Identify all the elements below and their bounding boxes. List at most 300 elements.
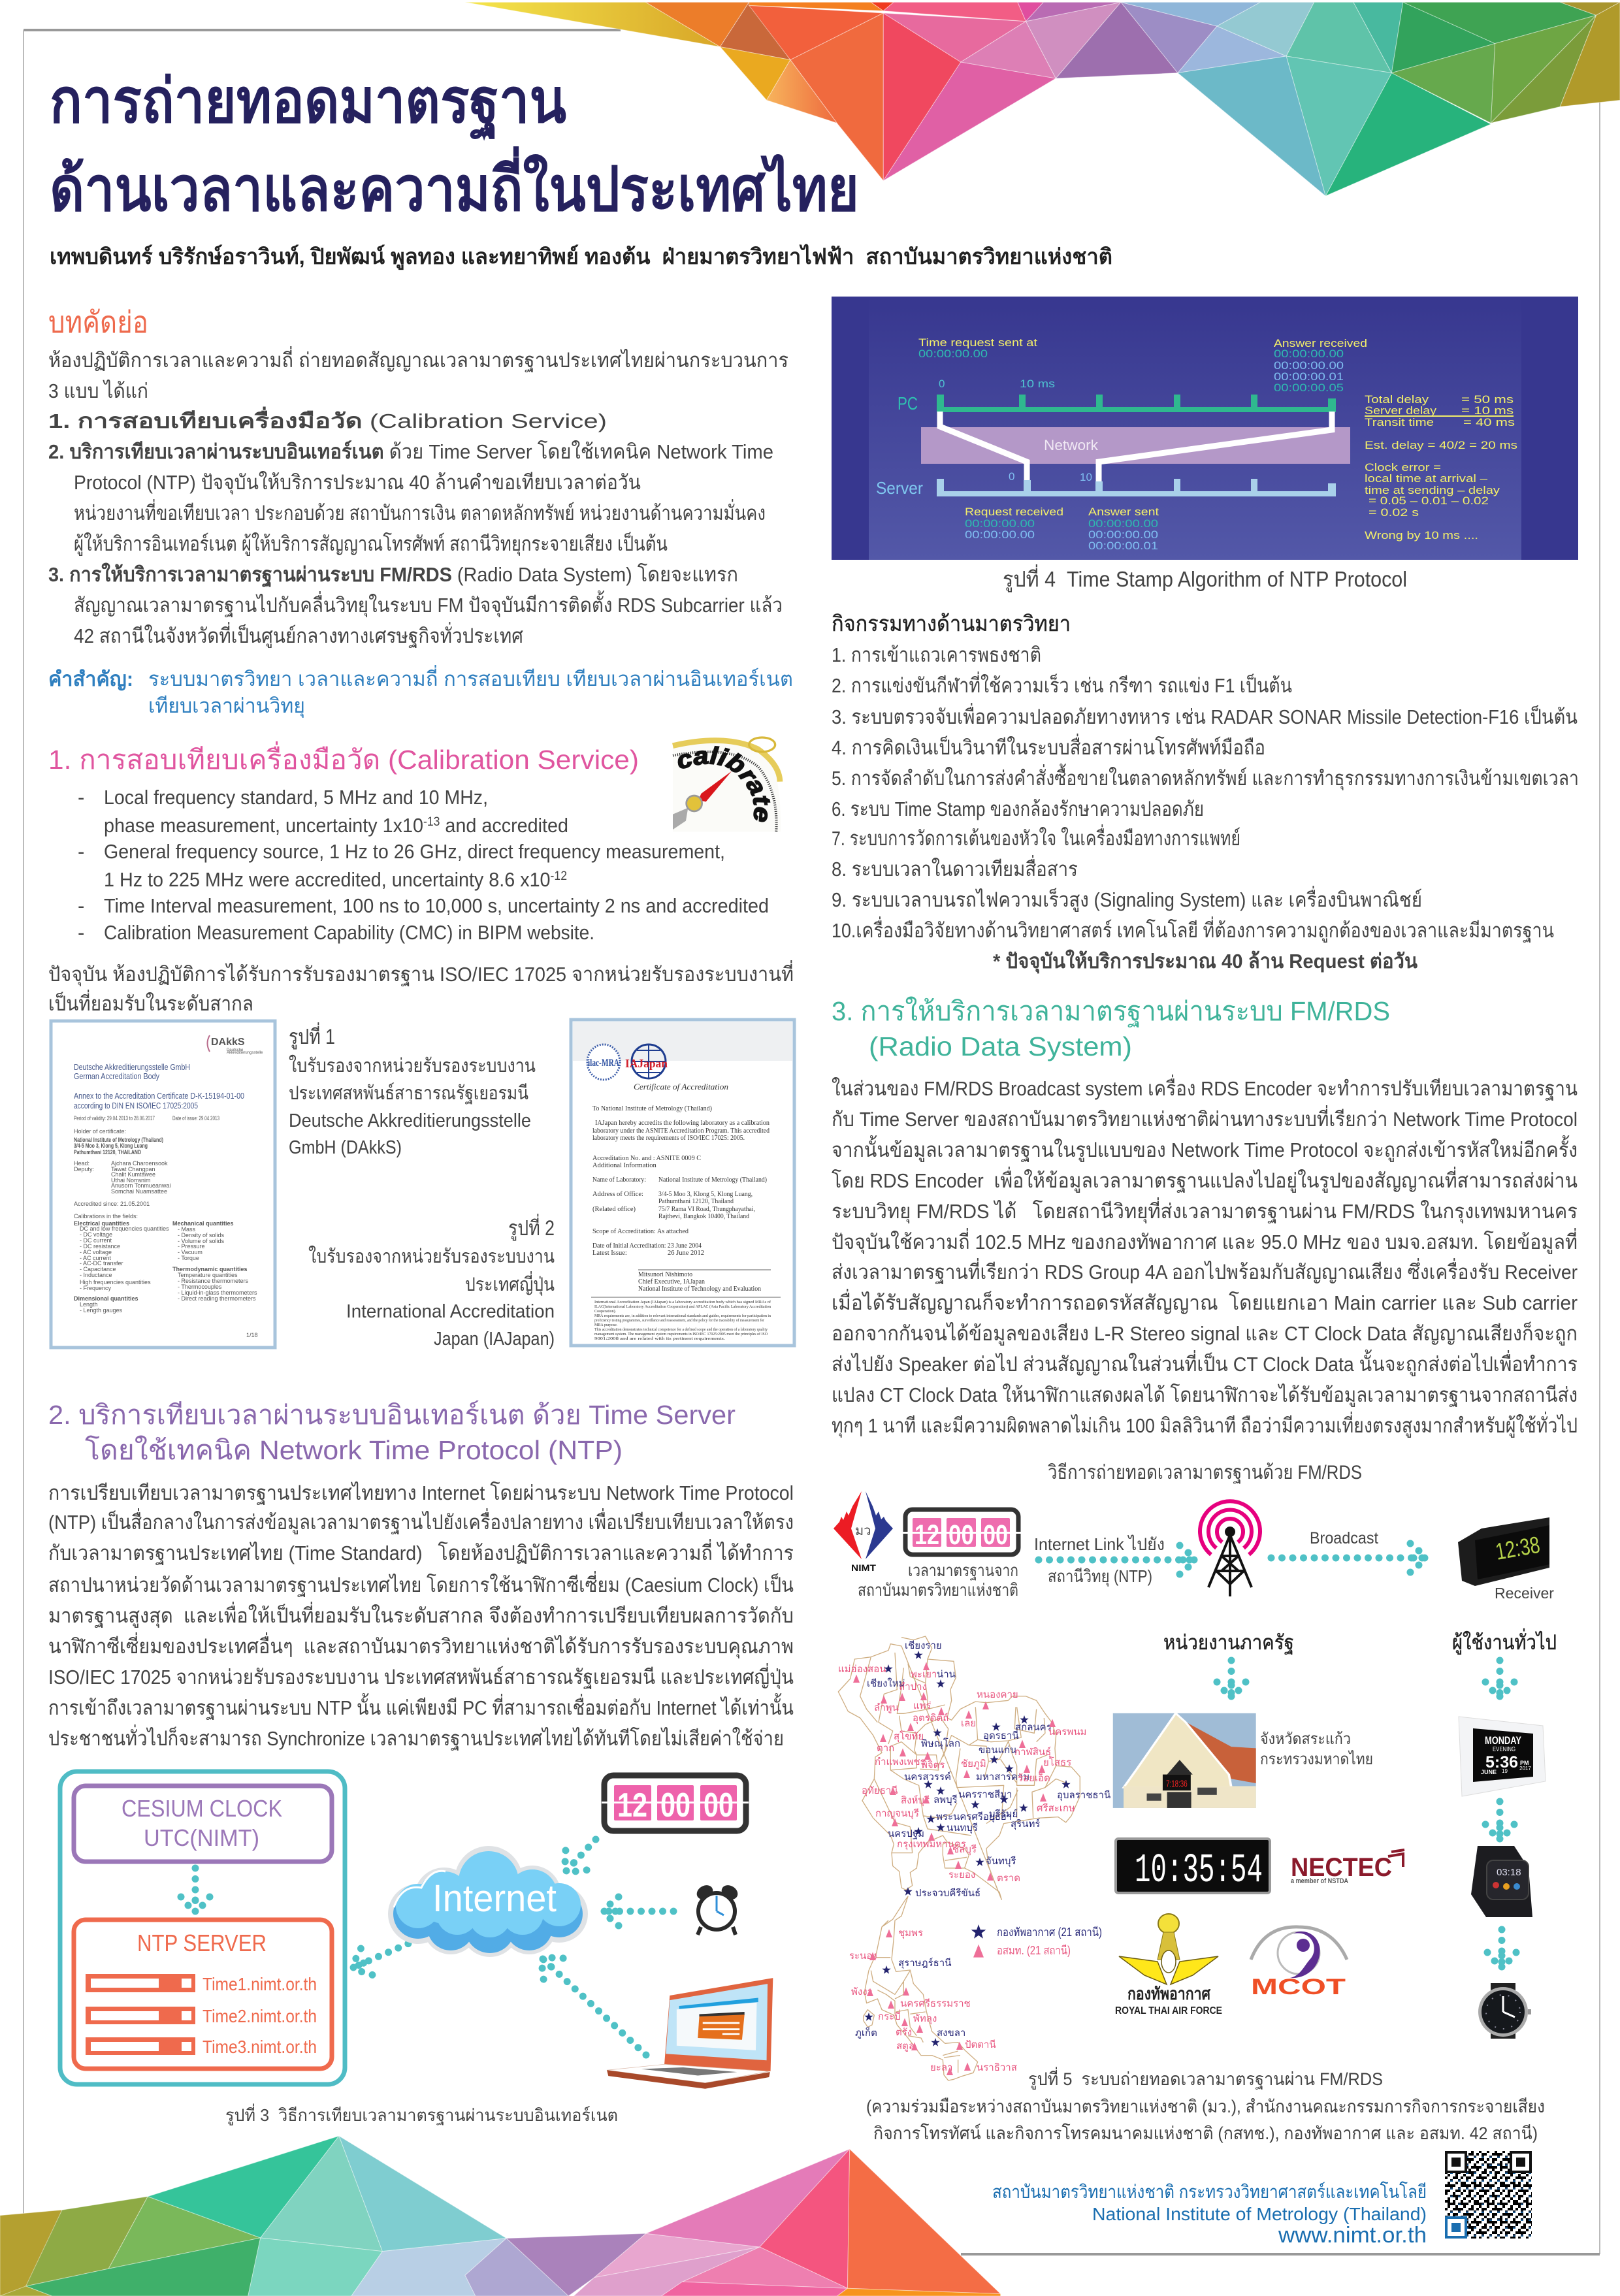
- MCOT station labels: หนองคาย: [977, 1689, 1018, 1700]
- MCOT station labels: ตรัง: [896, 2027, 912, 2038]
- government agencies heading: หน่วยงานภาครัฐ: [1163, 1631, 1294, 1655]
- logo: NIMT: NIMT: [851, 1562, 876, 1573]
- request and answer labels: Time request sent at: [918, 336, 1037, 349]
- certificate: DAkkS: Chalit Kumtawee: [111, 1171, 155, 1178]
- delay calculation: local time at arrival –: [1365, 472, 1488, 485]
- certificate: IAJapan: International Accreditation Japan (IAJapan) is a laboratory accreditation body which has signed MRAs of: [594, 1300, 771, 1304]
- arrow: internet to NTP server: [343, 1939, 418, 1985]
- section 2 body text: [48, 1481, 794, 1751]
- logo: MCOT: [1251, 1927, 1347, 1999]
- network band: [921, 427, 1350, 464]
- section 2 heading: โดยใช้เทคนิค Network Time Protocol (NTP): [85, 1435, 623, 1465]
- NTP server box: NTP SERVER: [137, 1930, 267, 1956]
- section 1 heading: 1. การสอบเทียบเครื่องมือวัด (Calibration Service): [48, 741, 639, 775]
- footer institute credit: National Institute of Metrology (Thailand): [1092, 2204, 1427, 2224]
- air force station labels: มหาสารคาม: [976, 1771, 1029, 1783]
- icon: radio tower: [1200, 1501, 1260, 1596]
- metrology activities list: 6. ระบบ Time Stamp ของกล้องรักษาความปลอดภัย: [832, 798, 1204, 820]
- certificate: DAkkS: Pathumthani 12120, THAILAND: [74, 1149, 141, 1156]
- certificate: DAkkS: - Resistance thermometers: [178, 1278, 249, 1284]
- certificate: IAJapan: Scope of Accreditation: As attached: [592, 1228, 689, 1235]
- title: การถ่ายทอดมาตรฐาน: [50, 67, 566, 141]
- Sa Kaeo label: กระทรวงมหาดไทย: [1260, 1750, 1373, 1768]
- figure 5 title: วิธีการถ่ายทอดเวลามาตรฐานด้วย FM/RDS: [1048, 1462, 1362, 1484]
- certificate: IAJapan: Certificate of Accreditation: [634, 1082, 728, 1091]
- air force station labels: ประจวบคีรีขันธ์: [915, 1888, 980, 1899]
- section 3 heading: 3. การให้บริการเวลามาตรฐานผ่านระบบ FM/RDS: [832, 996, 1390, 1027]
- light-blue timestamps: 00:00:00.00: [965, 528, 1035, 541]
- MCOT station labels: กระบี่: [878, 2009, 901, 2022]
- certificate: DAkkS: 3/4-5 Moo 3, Klong 5, Klong Luang: [74, 1142, 148, 1149]
- section 2 body text: ISO/IEC 17025 จากหน่วยรับรองระบบงาน ประเทศสหพันธ์สาธารณรัฐเยอรมนี และประเทศญี่ปุ่น: [48, 1663, 794, 1690]
- delay calculation: Transit time: [1365, 416, 1434, 428]
- icon: alarm clock: [694, 1883, 740, 1935]
- PC timeline: 0: [939, 378, 945, 390]
- logo: NECTEC: a member of NSTDA: [1291, 1877, 1348, 1885]
- map: Thailand FM/RDS stations: [838, 1636, 1110, 2080]
- teal timestamps: 00:00:00.00: [965, 517, 1035, 530]
- section 1 body text: [48, 960, 794, 1015]
- abstract body: 42 สถานีในจังหวัดที่เป็นศูนย์กลางทางเศรษฐกิจทั่วประเทศ: [74, 622, 523, 648]
- metrology activities list: 4. การคิดเงินเป็นวินาทีในระบบสื่อสารผ่านโทรศัพท์มือถือ: [832, 734, 1265, 759]
- MCOT station labels: สุโขทัย: [894, 1730, 924, 1743]
- MCOT station labels: ตาก: [877, 1743, 894, 1754]
- certificate: DAkkS: according to DIN EN ISO/IEC 17025:2005: [74, 1101, 198, 1110]
- icon: flip clock small: 00: [983, 1519, 1008, 1551]
- certificate: IAJapan: IAJapan: [625, 1057, 668, 1070]
- certificate: IAJapan: Date of Initial Accreditation: 23 June 2004: [592, 1242, 702, 1250]
- certificate: IAJapan: Pathumthani 12120, Thailand: [658, 1198, 734, 1205]
- icon: internet cloud: [388, 1846, 588, 1957]
- certificate: DAkkS: German Accreditation Body: [74, 1071, 159, 1081]
- figure 2 caption: Japan (IAJapan): [434, 1329, 555, 1350]
- white signal paths: [940, 412, 1332, 481]
- certificate: DAkkS: Thermodynamic quantities: [172, 1266, 248, 1272]
- certificate: IAJapan: Additional Information: [592, 1162, 656, 1169]
- arrow: NIMT to tower: [1039, 1542, 1198, 1578]
- internet link label: [1034, 1534, 1165, 1587]
- icon: receiver clock: [1458, 1517, 1554, 1602]
- icon: calibrate compass: calibrate: [678, 746, 771, 822]
- air force station labels: บุรีรัมย์: [989, 1809, 1018, 1820]
- section 1 bullet list: -13: [423, 815, 440, 829]
- delay calculation: Clock error =: [1365, 461, 1441, 474]
- air force station labels: น่าน: [937, 1669, 956, 1680]
- internet link label: Internet Link ไปยัง: [1034, 1534, 1165, 1554]
- icon: flip clock small: 12: [915, 1519, 939, 1551]
- panel: server frame: [60, 1771, 345, 2084]
- delay calculation: = 40 ms: [1463, 416, 1515, 428]
- delay calculation: = 10 ms: [1461, 404, 1514, 417]
- figure 4: NTP time stamp diagram: [832, 297, 1578, 560]
- icon: digital calendar clock: PM: [1520, 1760, 1529, 1766]
- icon: flip clock: 12: [617, 1787, 647, 1824]
- logo: NECTEC: NECTEC: [1291, 1853, 1392, 1882]
- certificate: DAkkS: Dimensional quantities: [74, 1295, 138, 1302]
- metrology activities list: 1. การเข้าแถวเคารพธงชาติ: [832, 643, 1041, 666]
- air force station labels: เชียงใหม่: [867, 1677, 905, 1689]
- PC timeline: PC: [898, 393, 918, 413]
- certificate: DAkkS: Deutsche: [227, 1048, 244, 1052]
- certificate: IAJapan: 26 June 2012: [668, 1250, 704, 1257]
- icon: wristwatch: [1478, 1983, 1531, 2039]
- air force station labels: เชียงราย: [905, 1640, 942, 1651]
- MCOT station labels: กาญจนบุรี: [875, 1808, 919, 1820]
- certificate: DAkkS: - Torque: [178, 1255, 199, 1261]
- map legend: กองทัพอากาศ (21 สถานี): [997, 1926, 1102, 1939]
- certificate: DAkkS: - Liquid-in-glass thermometers: [178, 1289, 257, 1296]
- section 3 body text: จากนั้นข้อมูลเวลามาตรฐานในรูปแบบของ Network Time Protocol จะถูกส่งเข้ารหัสใหม่อีกครั้ง: [832, 1135, 1578, 1162]
- MCOT station labels: ระยอง: [948, 1869, 975, 1881]
- figure 2 caption: International Accreditation: [346, 1301, 555, 1322]
- air force station labels: สุรินทร์: [1011, 1819, 1040, 1830]
- teal timestamps: 00:00:00.05: [1274, 381, 1344, 394]
- MCOT station labels: ปัตตานี: [965, 2039, 996, 2050]
- section 2 body text: ประชาชนทั่วไปก็จะสามารถ Synchronize เวลามาตรฐานประเทศไทยได้ทันทีโดยไม่เสียค่าใช้จ่าย: [48, 1724, 784, 1751]
- figure 4 caption: รูปที่ 4 Time Stamp Algorithm of NTP Protocol: [1003, 564, 1407, 592]
- certificate: DAkkS: Deputy:: [74, 1166, 94, 1172]
- light-blue timestamps: [965, 359, 1344, 552]
- air force station labels: นครสวรรค์: [904, 1771, 951, 1783]
- certificate: DAkkS: Ajchara Charoensook: [111, 1160, 168, 1167]
- keywords: เทียบเวลาผ่านวิทยุ: [148, 694, 305, 719]
- certificate: DAkkS: - Vacuum: [178, 1249, 202, 1255]
- certificate: IAJapan: (Related office): [592, 1206, 636, 1213]
- section 3 body text: [832, 1075, 1578, 1438]
- icon: digital calendar clock: EVENING: [1493, 1746, 1515, 1753]
- figure 2 caption: [308, 1214, 555, 1350]
- LED time display: 10:35:54: [1135, 1847, 1263, 1894]
- internet link label: สถานีวิทยุ (NTP): [1048, 1566, 1152, 1587]
- certificate: IAJapan: IAJapan hereby accredits the following laboratory as a calibration: [595, 1120, 770, 1127]
- section 2 body text: การเข้าถึงเวลามาตรฐานผ่านระบบ NTP นั้น แค่เพียงมี PC ที่สามารถเชื่อมต่อกับ Internet ได้เท่านั้น: [48, 1693, 794, 1720]
- photo: Sa Kaeo provincial hall with clock: 7:18:36: [1166, 1778, 1188, 1789]
- certificate: DAkkS: Head:: [74, 1160, 89, 1167]
- section 3 heading: [832, 996, 1390, 1061]
- certificate: IAJapan: MRA purpose.: [594, 1323, 618, 1327]
- delay calculation: Wrong by 10 ms ....: [1365, 529, 1478, 542]
- figure 1 caption: รูปที่ 1: [289, 1022, 335, 1050]
- MCOT station labels: กาฬสินธุ์: [1014, 1747, 1051, 1758]
- section 2 heading: [48, 1400, 736, 1465]
- delay calculation: Total delay: [1365, 393, 1429, 406]
- title: [50, 67, 859, 223]
- certificate: IAJapan: Chief Executive, IAJapan: [638, 1278, 705, 1285]
- certificate: DAkkS: High frequencies quantities: [80, 1279, 151, 1285]
- section 1 bullet list: -: [78, 840, 84, 863]
- section 3 body text: ออกจากกันจนได้ข้อมูลของเสียง L-R Stereo signal และ CT Clock Data สัญญาณเสียงก็จะถูก: [832, 1321, 1578, 1346]
- certificate: IAJapan: 3/4-5 Moo 3, Klong 5, Klong Luang,: [658, 1191, 753, 1198]
- certificate: DAkkS: - Length gauges: [80, 1307, 123, 1314]
- certificate: IAJapan: ILAC(International Laboratory Accreditation Cooperation) and APLAC (Asia Pacific Laboratory Accreditation: [594, 1304, 771, 1309]
- arrow: smartwatch to wristwatch: [1484, 1930, 1519, 1970]
- logo: NIMT: มว: [855, 1524, 871, 1538]
- MCOT station labels: ตราด: [997, 1873, 1020, 1884]
- section 1 bullet list: [78, 786, 769, 944]
- NIMT source label: [858, 1560, 1018, 1600]
- footer institute credit: สถาบันมาตรวิทยาแห่งชาติ กระทรวงวิทยาศาสตร์และเทคโนโลยี: [992, 2181, 1427, 2202]
- certificate: IAJapan: laboratory meets the requirements of ISO/IEC 17025: 2005.: [592, 1135, 745, 1142]
- MCOT station labels: กรุงเทพมหานคร: [897, 1839, 966, 1851]
- certificate: DAkkS: Deutsche Akkreditierungsstelle GmbH: [74, 1062, 190, 1072]
- air force station labels: สุราษฎร์ธานี: [898, 1958, 951, 1969]
- figure 5 caption: (ความร่วมมือระหว่างสถาบันมาตรวิทยาแห่งชาติ (มว.), สำนักงานคณะกรรมการกิจการกระจายเสียง: [866, 2097, 1545, 2116]
- certificate: DAkkS: - Capacitance: [80, 1266, 116, 1272]
- metrology activities list: 8. ระบบเวลาในดาวเทียมสื่อสาร: [832, 855, 1078, 881]
- MCOT station labels: แพร่: [913, 1700, 932, 1711]
- MCOT station labels: ชัยภูมิ: [961, 1758, 986, 1770]
- metrology activities list: * ปัจจุบันให้บริการประมาณ 40 ล้าน Request ต่อวัน: [993, 949, 1418, 974]
- icon: flip clock: [602, 1775, 749, 1831]
- certificate: DAkkS: Anusorn Tonmueanwai: [111, 1182, 170, 1189]
- delay calculation: Server delay: [1365, 404, 1437, 417]
- MCOT station labels: แม่ฮ่องสอน: [838, 1664, 886, 1675]
- certificate: IAJapan: MRA requirements are, in addition to relevant international standards and guides, requirements for participation in: [594, 1314, 771, 1318]
- MCOT station labels: พัทลุง: [913, 2013, 937, 2025]
- MCOT station labels: นราธิวาส: [977, 2062, 1017, 2073]
- PC timeline: 10 ms: [1020, 378, 1055, 390]
- section 3 body text: ปัจจุบันใช้ความถี่ 102.5 MHz ของกองทัพอากาศ และ 95.0 MHz ของ บมจ.อสมท. โดยข้อมูลที่: [832, 1228, 1578, 1255]
- arrow: calendar to smartwatch: [1482, 1802, 1518, 1842]
- certificate: IAJapan: Address of Office:: [592, 1191, 643, 1198]
- section 1 bullet list: Time Interval measurement, 100 ns to 10,000 s, uncertainty 2 ns and accredited: [104, 894, 769, 917]
- figure 3 caption: รูปที่ 3 วิธีการเทียบเวลามาตรฐานผ่านระบบอินเทอร์เนต: [225, 2103, 618, 2126]
- certificate: DAkkS: Period of validity: 29.04.2013 to 28.06.2017: [74, 1115, 155, 1122]
- certificate: DAkkS: Length: [80, 1301, 98, 1308]
- cesium clock box: [74, 1786, 332, 1862]
- top decorative polygon banner: [465, 2, 1620, 196]
- metrology activities list: 9. ระบบเวลาบนรถไฟความเร็วสูง (Signaling System) และ เครื่องบินพาณิชย์: [832, 886, 1422, 912]
- icon: flip clock small: [902, 1510, 1022, 1555]
- certificate: DAkkS: Accredited since: 21.05.2001: [74, 1201, 150, 1207]
- authors: เทพบดินทร์ บริรักษ์อราวินท์, ปิยพัฒน์ พูลทอง และทยาทิพย์ ทองต้น ฝ่ายมาตรวิทยาไฟฟ้า สถาบันมาตรวิทยาแห่งชาติ: [50, 244, 1112, 270]
- MCOT station labels: ศรีสะเกษ: [1037, 1803, 1075, 1814]
- Sa Kaeo label: จังหวัดสระแก้ว: [1260, 1730, 1351, 1748]
- certificate: DAkkS: Tawat Changpan: [111, 1166, 155, 1172]
- network band: Network: [1044, 437, 1099, 453]
- light-blue timestamps: 00:00:00.01: [1088, 540, 1158, 552]
- air force station labels: นครปฐม: [888, 1828, 924, 1839]
- section 2 body text: มาตรฐานสูงสุด และเพื่อให้เป็นที่ยอมรับในระดับสากล จึงต้องทำการเปรียบเทียบผลการวัดกับ: [48, 1602, 794, 1628]
- abstract body: หน่วยงานที่ขอเทียบเวลา ประกอบด้วย สถาบันการเงิน ตลาดหลักทรัพย์ หน่วยงานด้านความมั่นคง: [74, 499, 766, 525]
- air force station labels: จันทบุรี: [986, 1856, 1016, 1868]
- server timeline: 10: [1080, 471, 1092, 483]
- arrow: internet to laptop: [528, 1943, 646, 2055]
- logo: Royal Thai Air Force: [1115, 1914, 1222, 2016]
- section 1 bullet list: -: [78, 921, 84, 944]
- request and answer labels: Request received: [965, 506, 1063, 518]
- MCOT station labels: ร้อยเอ็ด: [1018, 1771, 1050, 1784]
- icon: digital calendar clock: [1459, 1717, 1546, 1796]
- air force station labels: ภูเก็ต: [855, 2026, 877, 2039]
- request and answer labels: Answer sent: [1088, 506, 1159, 518]
- MCOT station labels: ยะลา: [930, 2062, 952, 2073]
- delay calculation: = 0.02 s: [1369, 506, 1419, 519]
- air force station labels: พระนครศรีอยุธยา: [936, 1811, 1012, 1823]
- section 1 bullet list: -12: [551, 869, 567, 883]
- certificate: IAJapan: management system. The management system requirements in ISO/IEC 17025:2005 meet the principles of ISO: [594, 1332, 768, 1336]
- figure 2 caption: รูปที่ 2: [508, 1214, 555, 1241]
- certificate: DAkkS: Annex to the Accreditation Certificate D-K-15194-01-00: [74, 1091, 244, 1101]
- icon: receiver clock: Receiver: [1495, 1585, 1554, 1602]
- MCOT station labels: นครพนม: [1048, 1726, 1086, 1738]
- certificate: DAkkS: - Frequency: [80, 1285, 112, 1291]
- logo: Royal Thai Air Force: กองทัพอากาศ: [1127, 1984, 1210, 2003]
- certificate: DAkkS: - Thermocouples: [178, 1284, 222, 1290]
- figure 5 caption: [866, 2067, 1545, 2143]
- figure 1 caption: ประเทศสหพันธ์สาธารณรัฐเยอรมนี: [289, 1082, 528, 1105]
- certificate: DAkkS: - Inductance: [80, 1272, 112, 1278]
- figure 1 caption: GmbH (DAkkS): [289, 1137, 402, 1158]
- MCOT station labels: พังงา: [851, 1986, 873, 1997]
- NTP server box: Time2.nimt.or.th: [202, 2006, 317, 2026]
- air force station labels: อุดรธานี: [983, 1730, 1019, 1742]
- section 1 bullet list: and accredited: [440, 814, 568, 837]
- teal timestamps: 00:00:00.00: [1274, 348, 1344, 360]
- figure 1 caption: [289, 1022, 536, 1158]
- certificate: DAkkS: DC and low frequencies quantities: [80, 1225, 169, 1232]
- figure 2 caption: ประเทศญี่ปุ่น: [465, 1271, 555, 1296]
- section 3 body text: โดย RDS Encoder เพื่อให้ข้อมูลเวลามาตรฐานแปลงไปอยู่ในรูปของสัญญาณที่สามารถส่งผ่าน: [832, 1167, 1578, 1193]
- abstract body: Protocol (NTP) ปัจจุบันให้บริการประมาณ 40 ล้านคำขอเทียบเวลาต่อวัน: [74, 471, 641, 495]
- section 3 body text: ส่งไปยัง Speaker ต่อไป ส่วนสัญญาณในส่วนที่เป็น CT Clock Data นั้นจะถูกส่งต่อไปเพื่อทำการ: [832, 1350, 1578, 1376]
- abstract body: 1. การสอบเทียบเครื่องมือวัด (Calibration Service): [48, 406, 607, 432]
- section 1 body text: ปัจจุบัน ห้องปฏิบัติการได้รับการรับรองมาตรฐาน ISO/IEC 17025 จากหน่วยรับรองระบบงานที่: [48, 960, 794, 987]
- section 2 body text: (NTP) เป็นสื่อกลางในการส่งข้อมูลเวลามาตรฐานไปยังเครื่องปลายทาง เพื่อเปรียบเทียบเวลาให้ตรง: [48, 1508, 794, 1534]
- certificate: IAJapan: Latest Issue:: [592, 1250, 627, 1257]
- certificate: DAkkS: - DC resistance: [80, 1243, 120, 1250]
- MCOT station labels: นครศรีธรรมราช: [900, 1998, 971, 2009]
- certificate: DAkkS: Somchai Nuamsattee: [111, 1188, 167, 1195]
- certificate: DAkkS: Date of issue: 29.04.2013: [172, 1115, 219, 1122]
- certificate: IAJapan: 9001:2008 and are related with its pertinent requirements.: [594, 1337, 726, 1341]
- section 1 bullet list: -: [78, 894, 84, 917]
- section 1 body text: เป็นที่ยอมรับในระดับสากล: [48, 990, 253, 1015]
- metrology activities heading: กิจกรรมทางด้านมาตรวิทยา: [832, 611, 1071, 636]
- certificate: DAkkS: - DC current: [80, 1237, 112, 1244]
- teal timestamps: 00:00:00.00: [918, 348, 988, 360]
- section 1 bullet list: Local frequency standard, 5 MHz and 10 MHz,: [104, 786, 488, 809]
- server timeline: 0: [1009, 470, 1014, 483]
- MCOT station labels: พะเยา: [911, 1669, 937, 1680]
- certificate: IAJapan: Accreditation No. and : ASNITE 0009 C: [592, 1155, 701, 1162]
- MCOT station labels: ระนอง: [849, 1950, 877, 1962]
- figure 2 caption: ใบรับรองจากหน่วยรับรองระบบงาน: [308, 1245, 555, 1267]
- figure 3: NTP network diagram: [60, 1771, 773, 2089]
- MCOT station labels: เลย: [961, 1718, 976, 1729]
- certificate: DAkkS: Electrical quantities: [74, 1220, 129, 1227]
- server timeline: Server: [876, 478, 923, 498]
- cesium clock box: UTC(NIMT): [144, 1824, 259, 1851]
- triangle markers: [853, 1662, 1056, 2075]
- NIMT source label: สถาบันมาตรวิทยาแห่งชาติ: [858, 1580, 1018, 1600]
- abstract heading: บทคัดย่อ: [48, 305, 148, 339]
- icon: smartwatch: [1471, 1846, 1532, 1917]
- keywords: ระบบมาตรวิทยา เวลาและความถี่ การสอบเทียบ เทียบเวลาผ่านอินเทอร์เนต: [148, 665, 793, 690]
- MCOT station labels: สตูล: [896, 2041, 915, 2052]
- certificate: DAkkS: DAkkS: [211, 1037, 245, 1048]
- delay calculation: [1365, 393, 1517, 542]
- certificate: IAJapan: Mitsunori Nishimoto: [638, 1271, 692, 1278]
- icon: digital calendar clock: 2017: [1519, 1766, 1531, 1771]
- delay calculation: = 0.05 – 0.01 – 0.02: [1369, 494, 1489, 507]
- certificate: DAkkS: - Mass: [178, 1226, 196, 1233]
- certificate: IAJapan: [571, 1020, 794, 1346]
- star markers: [864, 1651, 1071, 2046]
- section 3 heading: (Radio Data System): [869, 1031, 1132, 1061]
- MCOT station labels: กำแพงเพชร: [875, 1756, 926, 1768]
- icon: receiver clock: 12:38: [1493, 1531, 1542, 1565]
- metrology activities list: [832, 643, 1579, 974]
- NTP server box: Time3.nimt.or.th: [202, 2037, 317, 2057]
- air force station labels: นครราชสีมา: [958, 1789, 1012, 1800]
- map outline south: [864, 1896, 978, 2080]
- certificate: IAJapan: proficiency testing programmes, surveillance and reassessment, and the policy for the traceability of measurement for: [594, 1318, 764, 1323]
- broadcast label: Broadcast: [1310, 1529, 1378, 1547]
- map outline north: [838, 1636, 1080, 1900]
- section 1 bullet list: General frequency source, 1 Hz to 26 GHz, direct frequency measurement,: [104, 840, 725, 863]
- certificate: IAJapan: To National Institute of Metrology (Thailand): [592, 1105, 712, 1112]
- certificate: DAkkS: Holder of certificate:: [74, 1128, 126, 1135]
- abstract body: 3 แบบ ได้แก่: [48, 380, 148, 402]
- delay calculation: = 50 ms: [1461, 393, 1514, 406]
- MCOT station labels: [838, 1664, 1086, 2073]
- section 2 body text: กับเวลามาตรฐานประเทศไทย (Time Standard) โดยห้องปฏิบัติการเวลาและความถี่ ได้ทำการ: [48, 1539, 794, 1565]
- abstract body: ผู้ให้บริการอินเทอร์เนต ผู้ให้บริการสัญญาณโทรศัพท์ สถานีวิทยุกระจายเสียง เป็นต้น: [74, 532, 668, 557]
- certificate: DAkkS: - DC voltage: [80, 1231, 112, 1238]
- section 2 body text: การเปรียบเทียบเวลามาตรฐานประเทศไทยทาง Internet โดยผ่านระบบ Network Time Protocol: [48, 1481, 794, 1505]
- MCOT station labels: ชุมพร: [898, 1928, 923, 1939]
- delay calculation: Est. delay = 40/2 = 20 ms: [1365, 439, 1517, 451]
- MCOT station labels: สิงห์บุรี: [901, 1795, 930, 1807]
- light-blue timestamps: 00:00:00.00: [1088, 528, 1158, 541]
- MCOT station labels: พิจิตร: [921, 1760, 945, 1771]
- certificate: IAJapan: National Institute of Metrology (Thailand): [658, 1176, 767, 1184]
- metrology activities list: 7. ระบบการวัดการเต้นของหัวใจ ในเครื่องมือทางการแพทย์: [832, 824, 1240, 850]
- logo: MCOT: MCOT: [1251, 1975, 1346, 1999]
- section 3 body text: เมื่อได้รับสัญญาณก็จะทำการถอดรหัสสัญญาณ โดยแยกเอา Main carrier และ Sub carrier: [832, 1289, 1578, 1314]
- NIMT source label: เวลามาตรฐานจาก: [908, 1560, 1018, 1581]
- LED time display: [1116, 1839, 1270, 1894]
- certificate: IAJapan: laboratory under the ASNITE Accreditation Program. This accredited: [592, 1127, 770, 1135]
- certificate: DAkkS: National Institute of Metrology (Thailand): [74, 1137, 163, 1143]
- certificate: DAkkS: - Volume of solids: [178, 1238, 225, 1244]
- general users heading: ผู้ใช้งานทั่วไป: [1452, 1628, 1557, 1655]
- certificate: DAkkS: [51, 1021, 275, 1348]
- section 1 bullet list: Calibration Measurement Capability (CMC) in BIPM website.: [104, 921, 594, 944]
- teal timestamps: 00:00:00.00: [1088, 517, 1158, 530]
- MCOT station labels: อุทัยธานี: [862, 1785, 898, 1797]
- NTP server box: Time1.nimt.or.th: [202, 1974, 317, 1994]
- section 2 body text: นาฬิกาซีเซี่ยมของประเทศอื่นๆ และสถาบันมาตรวิทยาแห่งชาติได้รับการรับรองระบบคุณภาพ: [48, 1632, 794, 1659]
- certificate: IAJapan: Rajthevi, Bangkok 10400, Thailand: [658, 1213, 750, 1220]
- air force station labels: สงขลา: [937, 2028, 965, 2039]
- icon: internet cloud: Internet: [432, 1877, 557, 1920]
- footer institute credit: www.nimt.or.th: [1278, 2223, 1427, 2248]
- server timeline: [876, 470, 1336, 498]
- figure 5 caption: รูปที่ 5 ระบบถ่ายทอดเวลามาตรฐานผ่าน FM/RDS: [1028, 2067, 1383, 2090]
- MCOT station labels: อุตรดิตถ์: [913, 1713, 948, 1724]
- arrow: agencies: [1214, 1660, 1249, 1700]
- certificate: IAJapan: ilac-MRA: [588, 1058, 619, 1069]
- icon: flip clock: 00: [660, 1787, 690, 1824]
- certificate: DAkkS: - Direct reading thermometers: [178, 1295, 256, 1302]
- certificate: IAJapan: This accreditation demonstrates technical competence for a defined scope and the operation of a laboratory quality: [594, 1327, 768, 1332]
- certificate: DAkkS: Mechanical quantities: [172, 1220, 234, 1227]
- MCOT station labels: ลำพูน: [874, 1702, 899, 1713]
- icon: smartwatch: 03:18: [1497, 1867, 1521, 1878]
- abstract body: สัญญาณเวลามาตรฐานไปกับคลื่นวิทยุในระบบ FM ปัจจุบันมีการติดตั้ง RDS Subcarrier แล้ว: [74, 590, 783, 618]
